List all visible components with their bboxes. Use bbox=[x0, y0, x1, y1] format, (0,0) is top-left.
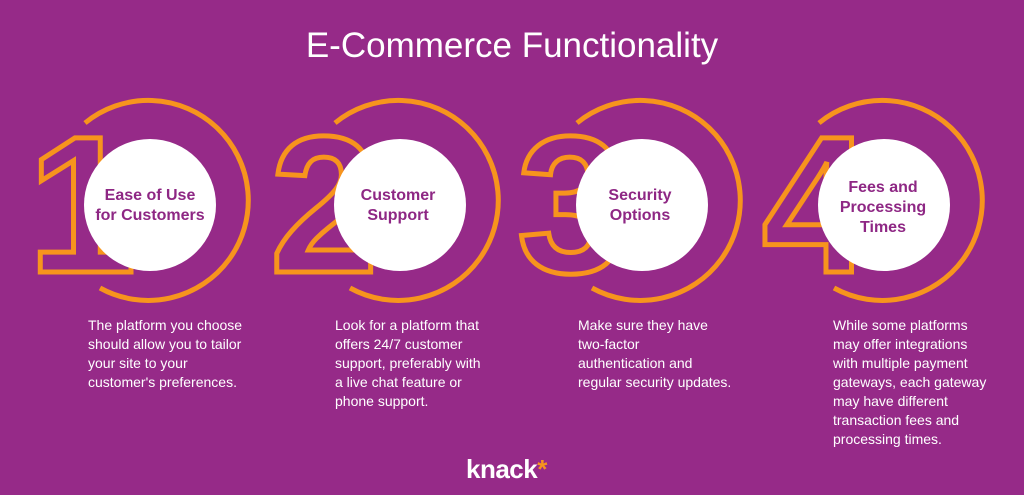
text 1: The platform you choose bbox=[88, 317, 242, 333]
text 2: support, preferably with bbox=[335, 355, 481, 371]
text 2: Look for a platform that bbox=[335, 317, 479, 333]
text 2 bbox=[335, 317, 481, 409]
text 2: a live chat feature or bbox=[335, 374, 462, 390]
text 1: should allow you to tailor bbox=[88, 336, 241, 352]
text 4: gateways, each gateway bbox=[833, 374, 986, 390]
heading 4: Times bbox=[860, 219, 906, 236]
item 3 graphic: 3 bbox=[517, 96, 625, 314]
text 4 bbox=[833, 317, 986, 447]
heading 4: Fees and bbox=[848, 179, 918, 196]
item 4 graphic bbox=[762, 96, 982, 314]
text 4: processing times. bbox=[833, 431, 942, 447]
heading 1: Ease of Use bbox=[105, 187, 195, 204]
text 1 bbox=[88, 317, 242, 390]
text 3: Make sure they have bbox=[578, 317, 708, 333]
text 1: your site to your bbox=[88, 355, 188, 371]
text 3: authentication and bbox=[578, 355, 692, 371]
text 4: with multiple payment bbox=[833, 355, 968, 371]
heading 3: Options bbox=[610, 207, 670, 224]
text 3 bbox=[578, 317, 731, 390]
heading 4: Processing bbox=[840, 199, 926, 216]
item 1 graphic bbox=[28, 96, 248, 314]
item 2 graphic bbox=[270, 96, 498, 314]
text 2: phone support. bbox=[335, 393, 428, 409]
text 1: customer's preferences. bbox=[88, 374, 237, 390]
heading 4 bbox=[840, 179, 926, 236]
logo: knack* bbox=[466, 454, 547, 484]
item 1 graphic: 1 bbox=[28, 96, 136, 314]
text 4: may have different bbox=[833, 393, 948, 409]
heading 3: Security bbox=[608, 187, 672, 204]
item 3 graphic bbox=[517, 96, 740, 314]
text 4: may offer integrations bbox=[833, 336, 967, 352]
text 3: two-factor bbox=[578, 336, 639, 352]
heading 2: Support bbox=[367, 207, 429, 224]
heading 2 bbox=[361, 187, 436, 224]
heading 1: for Customers bbox=[95, 207, 205, 224]
item 2 graphic: 2 bbox=[270, 96, 378, 314]
heading 2: Customer bbox=[361, 187, 435, 204]
text 4: While some platforms bbox=[833, 317, 968, 333]
text 3: regular security updates. bbox=[578, 374, 731, 390]
heading 3 bbox=[608, 187, 672, 224]
text 2: offers 24/7 customer bbox=[335, 336, 462, 352]
heading 1 bbox=[95, 187, 205, 224]
item 4 graphic: 4 bbox=[762, 96, 870, 314]
text 4: transaction fees and bbox=[833, 412, 959, 428]
title: E-Commerce Functionality bbox=[306, 26, 718, 65]
